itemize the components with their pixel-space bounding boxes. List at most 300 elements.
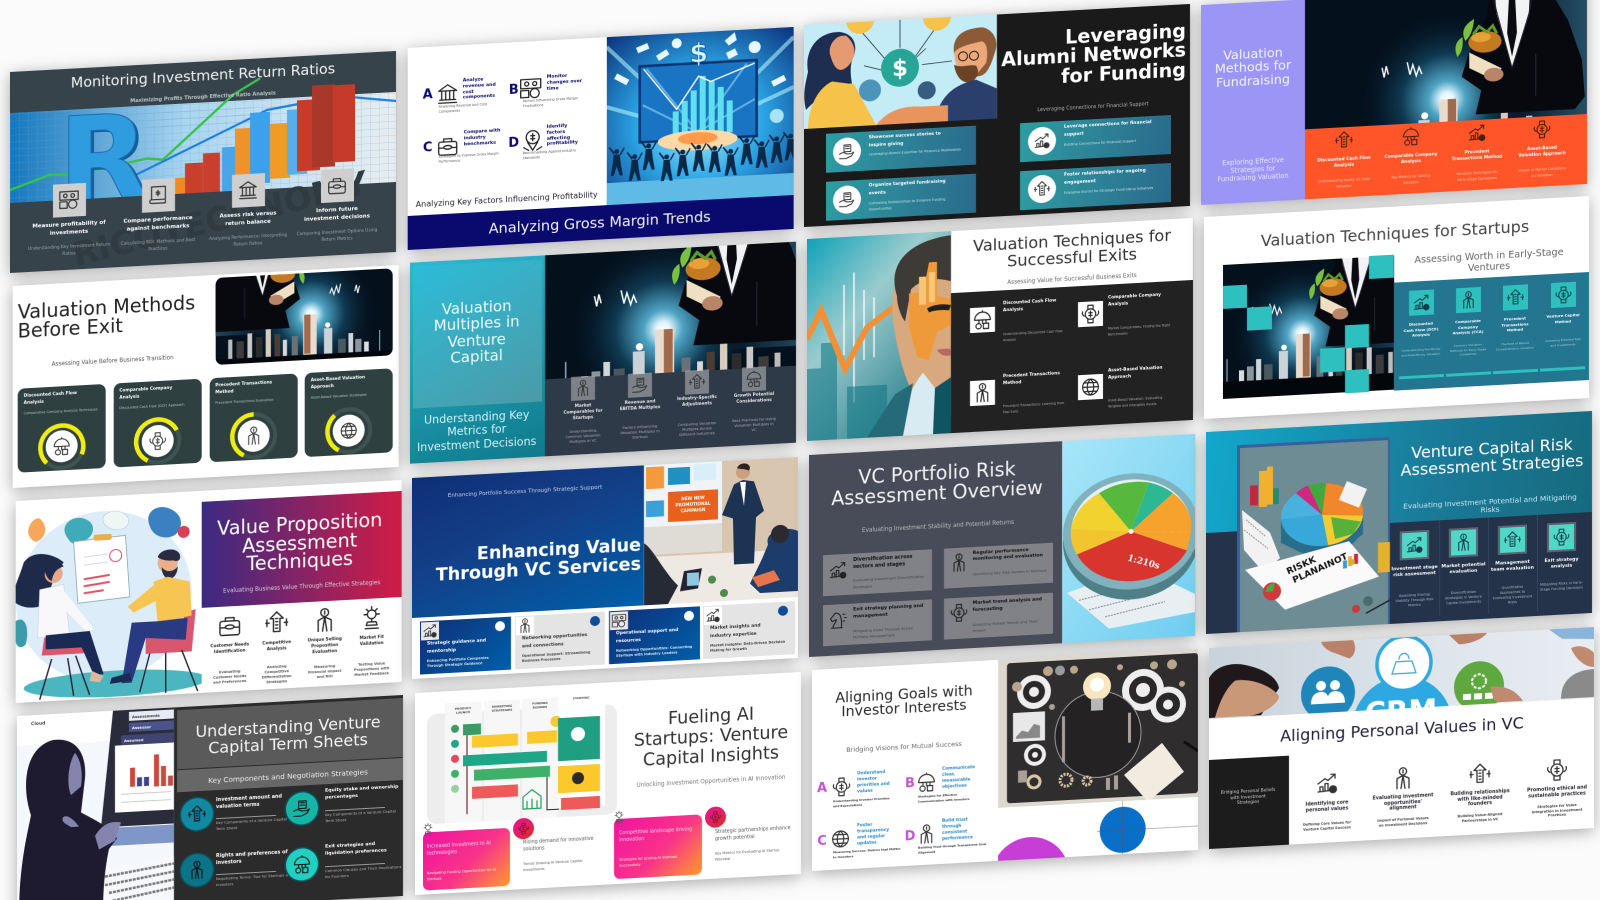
item: equity stake: percentages — [325, 793, 358, 800]
card: diversification: Strategies — [853, 584, 872, 590]
item D: identify factors: factors — [547, 130, 565, 136]
card: increased investment — [423, 828, 510, 891]
item D: identify factors: affecting — [547, 135, 570, 141]
subtitle: Maximizing Profits Through Effective Ratio Analysis — [130, 91, 276, 104]
item: inform decisions: Comparing Investment Options Using — [297, 228, 377, 237]
title — [1215, 46, 1291, 90]
card: exit strategy — [823, 599, 932, 646]
title: Valuation Methods — [18, 291, 195, 324]
card: organize events: Cultivating Relationships to Enhance Funding — [869, 197, 945, 205]
column: competitive analysis: Analysis — [267, 645, 287, 651]
title: Through VC Services — [436, 555, 641, 586]
column: industry adjustments: Comparing Valuation — [678, 421, 716, 427]
side box — [1209, 756, 1289, 849]
card: leverage connections: Building Connections for Financial Support — [1064, 139, 1136, 147]
item C: C — [817, 834, 827, 849]
card: market trends: Impact — [973, 627, 986, 633]
image: businessman and city — [545, 242, 796, 380]
column: exit strategy: Stage Funding Decisions — [1540, 585, 1583, 592]
image: presenter in meeting room: CAMPAIGN — [681, 507, 706, 513]
column: growth potential: Considerations — [736, 397, 772, 404]
title band — [177, 698, 403, 769]
column: opportunities alignment: Evaluating investment — [1373, 793, 1433, 802]
item D: identify factors: D — [508, 135, 519, 151]
column: ethical practices: Promoting ethical and — [1527, 785, 1587, 793]
card: organize events: events — [869, 191, 886, 196]
subtitle: Fundraising Valuation — [1217, 171, 1289, 183]
card: competitive landscape: innovation — [619, 838, 644, 844]
card: increased investment: technologies — [427, 851, 457, 857]
panel: Monitoring Investment Return Ratios slide — [10, 51, 396, 273]
card: diversification — [823, 549, 932, 596]
title: Enhancing Value — [477, 536, 641, 564]
column: revenue multiples — [620, 372, 660, 440]
title — [831, 458, 1043, 508]
column: market comparables: Market — [575, 402, 591, 408]
left teal panel — [410, 255, 545, 464]
card: comparable company: Analysis — [119, 394, 139, 400]
item B: monitor changes: changes over — [547, 79, 582, 86]
subtitle: Leveraging Connections for Financial Support — [1037, 101, 1149, 113]
image: roadmap chart: STARTING — [573, 695, 590, 700]
illustration: woman at computer: Assessor — [132, 724, 151, 730]
card: precedent transactions: Precedent Transactions — [215, 380, 272, 388]
item: discounted cash flow: Analysis — [1003, 338, 1016, 342]
column: market comparables: Multiples in VC — [569, 439, 597, 445]
item A: Understand — [857, 770, 885, 777]
column: comparable company: Companies — [1460, 351, 1476, 356]
column: growth potential: Valuation Multiples in — [734, 422, 774, 428]
column: market comparables — [563, 376, 603, 445]
column: relationships: Building Value-Aligned — [1458, 812, 1502, 818]
card: foster relationships: Foster relationships for ongoing — [1064, 168, 1146, 178]
column: core values: Venture Capital Success — [1303, 825, 1351, 832]
item: measure profitability: investments — [50, 229, 88, 237]
column: management team: Evaluating Investment — [1493, 594, 1532, 600]
icon: investment badge — [424, 822, 432, 836]
column: unique selling proposition: Proposition — [311, 642, 338, 648]
illustration: woman at computer: Cloud — [31, 720, 45, 727]
title: Capital Insights — [643, 743, 779, 771]
item D: through — [942, 824, 961, 830]
image: roadmap chart: PRODUCT — [455, 706, 472, 711]
column: discounted cash flow: Cash Flow (DCF) — [1404, 325, 1438, 332]
column: market fit: Market Fit — [360, 634, 384, 640]
item A: investor — [857, 777, 877, 783]
title: Understanding Venture — [195, 712, 381, 741]
card: operational support: resources — [616, 638, 641, 644]
column: opportunities alignment: on Investment Decisions — [1379, 821, 1427, 828]
column: venture capital method: and Investments — [1550, 342, 1576, 347]
column: customer needs: Customer Needs — [213, 674, 246, 680]
image: roadmap chart: ROUNDS — [533, 705, 547, 710]
card: leverage connections: support — [1064, 132, 1084, 138]
subtitle: Unlocking Investment Opportunities in AI Innovation — [637, 775, 785, 789]
item: rising demand — [512, 818, 594, 872]
column: market potential: Diversification — [1451, 590, 1476, 595]
item: compare performance: Compare performance — [123, 215, 193, 225]
title: Valuation Techniques for — [973, 226, 1171, 255]
title — [434, 297, 520, 367]
column: opportunities alignment — [1369, 764, 1437, 835]
column: customer needs: Identification — [214, 647, 245, 654]
column: precedent transactions: The Role of Market — [1501, 341, 1529, 346]
title: Aligning Goals with — [835, 683, 973, 707]
title: Fundraising — [1216, 72, 1290, 91]
teal panel — [1394, 272, 1589, 391]
title: Assessment — [242, 528, 357, 557]
column: comparable company: Analysis — [1401, 159, 1421, 165]
panel: Aligning Personal Values in VC slide — [1209, 627, 1594, 849]
item: asset based: Asset-Based Valuation: Evaluating — [1108, 396, 1162, 403]
title area — [951, 218, 1193, 293]
subtitle: Understanding Key — [424, 408, 529, 427]
item: rising demand: Investments — [523, 867, 545, 872]
item A: analyze revenue: cost — [463, 89, 474, 95]
subtitle: Assessing Value for Successful Business Exits — [1007, 273, 1137, 286]
column: investment stage: Assessing Startup — [1399, 592, 1430, 598]
panel: Value Proposition Assessment Techniques slide — [16, 480, 402, 703]
column: revenue multiples: Revenue and — [625, 399, 655, 405]
item A: analyze revenue: Analyze — [463, 77, 483, 83]
card: performance monitoring: Identifying Key Risk Factors in Startups — [973, 568, 1047, 577]
title: Monitoring Investment Return Ratios — [71, 61, 335, 92]
card: networking: and connections — [522, 642, 564, 649]
card: competitive landscape: Strategies for Scaling AI Startups — [619, 855, 677, 862]
subtitle: Key Components and Negotiation Strategies — [208, 767, 368, 785]
image: pie chart and risk plan — [1237, 437, 1390, 632]
item C: to Investors — [833, 854, 853, 859]
purple panel — [1201, 0, 1305, 205]
image: man's face with chart — [807, 231, 951, 441]
image: CRM circles and people — [1209, 627, 1594, 719]
column: investment stage — [1390, 520, 1440, 619]
card: leverage connections: Leverage connections for financial — [1064, 120, 1152, 130]
item D: identify factors: Standards — [523, 155, 540, 160]
card: increased investment: Startups — [427, 877, 442, 881]
item: equity stake: Key Components of a Venture Capital — [325, 808, 396, 817]
card: performance monitoring — [944, 543, 1053, 589]
item: asset based: Tangible and Intangible Assets — [1108, 402, 1157, 409]
column: ethical practices: Integration in Investment — [1532, 807, 1582, 814]
card: discounted cash flow — [18, 384, 106, 473]
icon: landscape badge — [614, 810, 624, 824]
item A: analyze revenue: Analyzing Revenue and Cost — [439, 102, 487, 109]
item: rising demand: Trends Shaping AI Venture Capital — [523, 859, 582, 866]
item D: D — [905, 829, 915, 844]
column: ethical practices: Strategies for Value — [1537, 803, 1577, 809]
column: ethical practices: sustainable practices — [1528, 791, 1586, 800]
column: discounted cash flow: Valuation — [1336, 184, 1352, 189]
card: networking: Operational Support: Streamlining — [522, 650, 590, 658]
item: strategic partnerships: growth potential — [715, 835, 755, 843]
column: customer needs: Evaluating — [219, 669, 240, 674]
card: strategic guidance: Enhancing Portfolio Companies — [427, 656, 489, 663]
panel: Analyzing Gross Margin Trends slide — [408, 27, 794, 250]
card: foster relationships: engagement — [1064, 179, 1096, 186]
column: customer needs: Customer Needs — [210, 641, 249, 649]
item B — [904, 762, 996, 805]
title — [1401, 436, 1583, 479]
card: operational support: Networking Opportunities: Connecting — [616, 645, 692, 653]
column: relationships: founders — [1468, 801, 1492, 808]
item D: Building Trust through Transparent Goal — [918, 842, 986, 850]
item: exit strategies: for Founders — [325, 873, 349, 879]
title: Value Proposition — [217, 508, 382, 540]
title: Assessment Overview — [831, 475, 1043, 510]
item B: monitor changes: B — [509, 82, 519, 98]
item: rights and preferences: Investors — [216, 881, 233, 887]
column: precedent transactions: Valuation Techniques for — [1456, 170, 1498, 176]
subtitle: Strategies for — [1231, 164, 1275, 174]
image: blue chart with R and 3D bars: R — [58, 88, 149, 230]
card: performance monitoring: monitoring and evaluation — [973, 553, 1043, 562]
card: market trends: Market trend analysis and — [973, 597, 1042, 606]
item: rising demand: solutions — [523, 847, 544, 853]
column: market fit: Validation — [360, 640, 384, 646]
item B: Communication with Investors — [918, 796, 970, 803]
item: assess risk: Return Ratios — [234, 241, 262, 248]
item: rights and preferences: Negotiating Terms: Tips for Startups and — [216, 872, 293, 881]
column: comparable company — [1445, 283, 1491, 382]
image: presenter in meeting room: NEW NEW — [681, 495, 705, 501]
illustration: two people and dollar coin: $ — [892, 55, 908, 82]
item: measure profitability — [28, 182, 110, 257]
image: presenter in meeting room — [644, 457, 798, 606]
subtitle: Exploring Effective — [1222, 156, 1284, 167]
card: exit strategy: Exit strategy planning and — [853, 604, 923, 613]
image: celebrating crowd and glowing chart: $ — [689, 38, 708, 70]
column: comparable company: Company — [1458, 323, 1478, 329]
card: market insights — [703, 601, 795, 659]
image: businessman and city — [215, 268, 394, 365]
column: unique selling proposition: Financial Impact — [308, 669, 341, 675]
title: Alumni Networks — [1001, 39, 1186, 72]
panel: Valuation Multiples in Venture Capital slide — [410, 242, 796, 464]
item: comparable company: Benchmarks — [1108, 332, 1128, 337]
column: comparable company — [1378, 122, 1444, 191]
column: asset based: Asset-Based — [1527, 146, 1557, 152]
item: precedent transactions: Precedent Transactions: Learning from — [1003, 401, 1064, 408]
card: networking — [515, 611, 605, 669]
column: venture capital method: Assessing Potential Risk — [1545, 337, 1581, 343]
decorative circles — [998, 797, 1198, 861]
image: roadmap chart: FUNDING — [532, 701, 548, 706]
column: asset based: Valuation Approach — [1518, 151, 1566, 159]
card: market trends — [944, 593, 1053, 640]
item: rights and preferences — [179, 849, 293, 888]
column: management team: Risks — [1508, 600, 1517, 605]
item C: and regular — [857, 834, 885, 841]
item B: objectives — [942, 783, 967, 790]
card: diversification: Diversification across — [853, 554, 912, 563]
item: exit strategies: liquidation preferences — [325, 848, 387, 856]
column: precedent transactions: Precedent — [1504, 315, 1526, 321]
column: asset based: on Valuation — [1531, 173, 1553, 178]
item B: Strategies for Effective — [918, 793, 957, 799]
column: management team: Management — [1495, 560, 1530, 567]
card: market trends: forecasting — [973, 606, 1003, 613]
column: market fit: Testing Value — [358, 661, 385, 667]
column: core values — [1293, 768, 1361, 839]
item A: Understanding Investor Priorities — [833, 796, 890, 803]
column: investment stage: Metrics — [1408, 603, 1421, 608]
subtitle: Assessing Worth in Early-Stage — [1414, 247, 1564, 266]
title: for Funding — [1061, 58, 1186, 88]
subtitle: Metrics for — [447, 423, 506, 439]
illustration: woman at computer: Assessments — [132, 713, 161, 719]
column: unique selling proposition: Evaluation — [312, 647, 337, 654]
item: rights and preferences: investors — [216, 859, 242, 866]
item: investment amount: Investment amount and — [216, 794, 282, 803]
subtitle: Evaluating Investment Potential and Mitigating — [1403, 492, 1577, 511]
column: unique selling proposition: and ROI — [317, 674, 333, 679]
column: competitive analysis: Differentiation — [262, 674, 292, 680]
item A: priorities and — [857, 782, 890, 789]
item: inform decisions: Return Metrics — [321, 236, 353, 243]
column: discounted cash flow: Discounted Cash Flow — [1317, 156, 1371, 164]
title: Analyzing Gross Margin Trends — [489, 209, 711, 237]
column: comparable company: Comparable — [1455, 318, 1481, 324]
card: increased investment: Increased investment in AI — [427, 841, 491, 850]
column: revenue multiples: EBITDA Multiples — [620, 404, 660, 411]
item: strategic partnerships: Strategic partnerships enhance — [715, 826, 791, 835]
item: exit strategies: Common Clauses and Their Implications — [325, 864, 402, 873]
card: asset based: Asset-Based Valuation — [311, 375, 365, 383]
image: dark board with targets and light bulb — [998, 649, 1198, 808]
card: foster relationships: Engaging Alumni for Strategic Fundraising Initiatives — [1064, 186, 1153, 195]
subtitle: Assessing Value Before Business Transition — [52, 355, 174, 368]
column: precedent transactions: Method — [1507, 326, 1523, 332]
panel: VC Portfolio Risk Assessment Overview slide — [809, 434, 1195, 657]
card: market insights: Making for Growth — [710, 647, 747, 653]
card: precedent transactions: Precedent Transactions Evaluation — [215, 398, 274, 405]
card: organize events: Organize targeted fundraising — [869, 179, 946, 188]
title: Valuation Techniques for Startups — [1261, 217, 1529, 250]
card: showcase success: Leveraging Alumni Expertise for Resource Mobilization — [869, 147, 961, 156]
column: market fit — [354, 606, 390, 677]
column: industry adjustments: Industry-Specific — [677, 394, 717, 401]
item A — [816, 767, 906, 810]
side text: Strategies — [1237, 800, 1259, 806]
title: Multiples in — [434, 312, 520, 335]
column: venture capital method: Venture Capital — [1546, 312, 1580, 319]
card: asset based: Approach — [311, 384, 334, 390]
column: asset based: Impact of Market Conditions — [1518, 166, 1566, 173]
card: strategic guidance: Strategic guidance and — [427, 638, 486, 647]
card: operational support: Operational support and — [616, 628, 678, 636]
item: discounted cash flow — [970, 296, 1074, 348]
column: market potential: Market potential — [1441, 562, 1486, 569]
panel: Valuation Techniques for Startups slide — [1204, 196, 1589, 419]
title: Capital Term Sheets — [208, 730, 368, 758]
column: ethical practices: Practices — [1548, 813, 1566, 818]
column: revenue multiples: Factors Influencing — [623, 424, 657, 430]
title — [973, 228, 1171, 272]
column: discounted cash flow: Understanding Equity vs. Debt — [1318, 177, 1370, 184]
card: operational support — [609, 606, 700, 664]
title: Successful Exits — [1007, 244, 1137, 270]
column: ethical practices — [1523, 755, 1591, 827]
image: roadmap chart — [427, 695, 617, 824]
item: inform decisions: investment decisions — [304, 213, 370, 223]
card: showcase success: Showcase success stories to — [869, 132, 941, 140]
image: risk gauge under magnifier: 1:210s — [1126, 554, 1161, 572]
item D: identify factors: Benchmarking Against Industry — [523, 148, 576, 155]
card: comparable company: Discounted Cash Flow (DCF) Approach — [119, 403, 185, 410]
column: management team: Approaches to — [1500, 590, 1525, 595]
item D: performance — [942, 835, 973, 842]
item: asset based: Approach — [1108, 374, 1131, 381]
item C: updates — [857, 840, 877, 846]
column: opportunities alignment: Impact of Personal Values — [1377, 816, 1429, 823]
title: Venture — [448, 329, 506, 351]
column: comparable company: Common Valuation — [1454, 342, 1482, 348]
subtitle: Evaluating Business Value Through Effective Strategies — [223, 580, 380, 595]
column: discounted cash flow: Understanding Pre-Money — [1402, 347, 1440, 353]
card: operational support: Startups with Industry Leaders — [616, 651, 678, 658]
item C: compare benchmarks: C — [423, 140, 432, 156]
item: inform decisions — [296, 168, 377, 243]
title — [18, 291, 195, 343]
illustration: woman at computer — [17, 708, 174, 900]
column: precedent transactions — [1492, 281, 1538, 379]
panel: Enhancing Value Through VC Services slide — [412, 457, 798, 679]
subtitle: Bridging Visions for Mutual Success — [846, 740, 962, 754]
card: discounted cash flow: Discounted Cash Flow — [24, 391, 77, 399]
column: precedent transactions: Precedent — [1465, 149, 1489, 156]
panel: Understanding Venture Capital Term Sheets slide — [17, 695, 403, 900]
card: strategic guidance: mentorship — [427, 648, 456, 654]
column: competitive analysis: Competitive — [264, 669, 289, 674]
title panel — [202, 491, 402, 608]
item: strategic partnerships — [704, 806, 791, 862]
image: celebrating crowd and glowing chart — [606, 27, 794, 206]
title: Fueling AI — [668, 705, 754, 729]
item: exit strategies: Exit strategies and — [325, 842, 375, 850]
title — [634, 705, 788, 771]
illustration: woman at computer: Assumed — [124, 737, 144, 743]
title: Startups: Venture — [634, 723, 788, 751]
column: growth potential: Best Practices for Using — [732, 417, 776, 423]
title: Valuation — [442, 297, 512, 318]
card: comparable company: Comparable Company — [119, 386, 172, 394]
column: relationships — [1446, 759, 1514, 831]
column: discounted cash flow: Analysis — [1334, 163, 1354, 169]
title: Before Exit — [18, 314, 123, 343]
column: venture capital method — [1540, 278, 1586, 377]
column: market potential: Capital Investments — [1446, 600, 1481, 605]
column: comparable company: Analysis (CCA) — [1452, 329, 1484, 335]
card: diversification: Evaluating Investment Diversification — [853, 574, 924, 583]
card: discounted cash flow: Comparative Company Analysis Techniques — [24, 407, 98, 415]
column: asset based — [1509, 115, 1575, 184]
subtitle — [417, 408, 536, 454]
column: exit strategy: Mitigating Risks in Early- — [1540, 580, 1583, 587]
column: unique selling proposition: Unique Selling — [308, 636, 342, 642]
item B: monitor changes: Factors Influencing Gross Margin — [523, 96, 578, 103]
column: comparable company: Valuation — [1403, 180, 1419, 185]
item D: Alignment — [918, 849, 935, 854]
column: investment stage: Investment stage — [1391, 565, 1438, 572]
column: industry adjustments: Different Industries — [679, 432, 715, 438]
card: strategic guidance — [420, 617, 511, 675]
panel: Venture Capital Risk Assessment Strategies slide — [1206, 411, 1592, 634]
item: assess risk: Analyzing Performance: Interpreting — [209, 233, 287, 242]
column: exit strategy: Exit strategy — [1544, 557, 1579, 564]
column: unique selling proposition — [308, 608, 342, 679]
column: discounted cash flow — [1311, 125, 1377, 195]
